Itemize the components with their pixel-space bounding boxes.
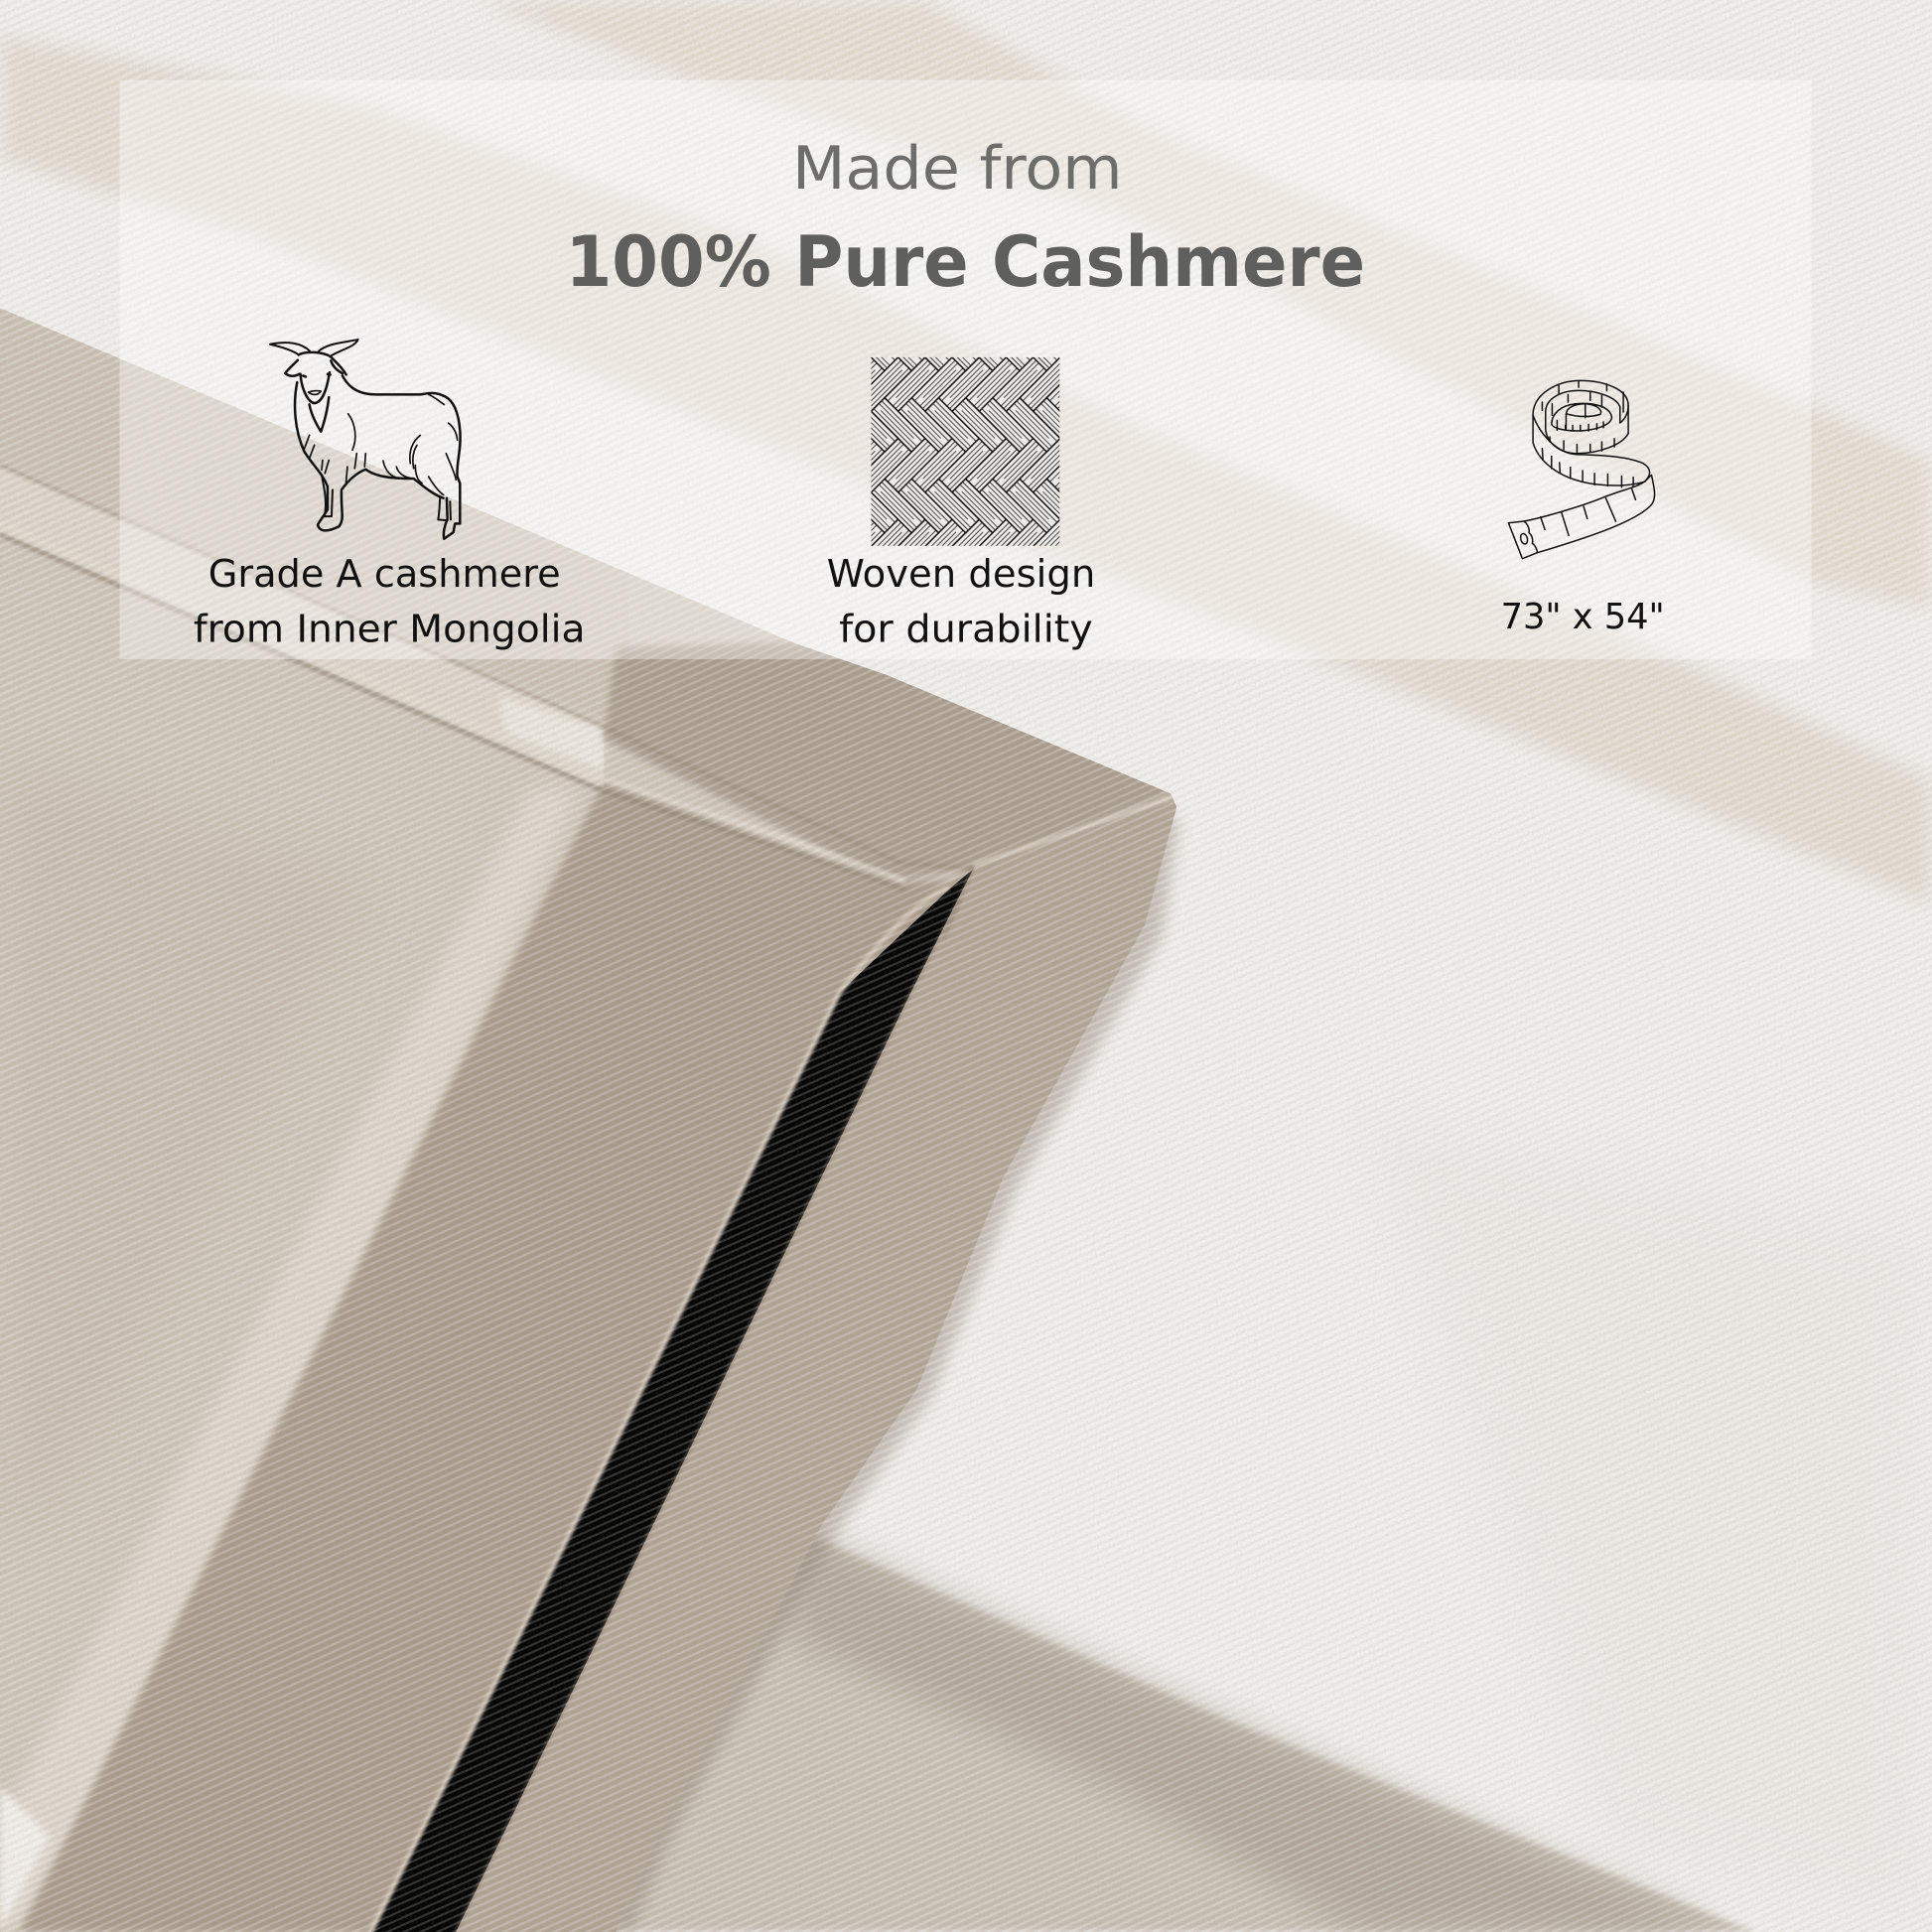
hem light band on the left bbox=[0, 466, 604, 788]
side hem strip bbox=[456, 794, 1182, 1932]
beige stripe upper right bbox=[475, 0, 1932, 610]
taupe stripe bottom right bbox=[592, 1532, 1756, 1932]
label: Woven design for durability: for durability bbox=[839, 608, 1093, 652]
light stripe on the left section bbox=[0, 788, 579, 1932]
stitched seam horizontal bbox=[0, 535, 905, 890]
upper hem ridge bbox=[0, 466, 973, 869]
label: Woven design for durability bbox=[827, 552, 1095, 652]
label: Grade A cashmere from Inner Mongolia: Grade A cashmere bbox=[208, 552, 561, 597]
inner hem edge bbox=[456, 899, 960, 1932]
dark band main bbox=[19, 782, 961, 1932]
translucent text panel bbox=[119, 80, 1811, 659]
label: Grade A cashmere from Inner Mongolia: from Inner Mongolia bbox=[194, 608, 586, 652]
dark band upper hem bbox=[604, 640, 1182, 881]
hem upper light area bbox=[6, 310, 117, 357]
pale streak on the hem bbox=[499, 696, 604, 770]
icon: measuring tape bbox=[1508, 380, 1655, 559]
lower right cream shading bbox=[1355, 1109, 1932, 1932]
fold shadow bbox=[579, 813, 1179, 1932]
raised seam horizontal highlight bbox=[0, 523, 905, 881]
heading: Made from: Made from bbox=[792, 135, 1123, 204]
mitred corner line bbox=[973, 798, 1171, 865]
pale corner at lower left bbox=[0, 1787, 50, 1932]
darker upper edge of the bottom right stripe bbox=[788, 1532, 1725, 1932]
darker stripe on the left section bbox=[58, 848, 62, 1374]
label: Woven design for durability: Woven design bbox=[827, 552, 1095, 597]
label: dimensions: 73" x 54" bbox=[1501, 597, 1665, 637]
vertical stitched line bbox=[371, 888, 949, 1932]
beige stripe middle diagonal bbox=[0, 35, 1932, 905]
icon: goat bbox=[270, 340, 461, 539]
label: Grade A cashmere from Inner Mongolia bbox=[194, 552, 586, 652]
turned hem between stitching bbox=[371, 869, 973, 1932]
icon: woven basket pattern bbox=[871, 357, 1059, 546]
heading: 100% Pure Cashmere: 100% Pure Cashmere bbox=[566, 220, 1365, 303]
folded blanket corner bbox=[0, 308, 1177, 1932]
